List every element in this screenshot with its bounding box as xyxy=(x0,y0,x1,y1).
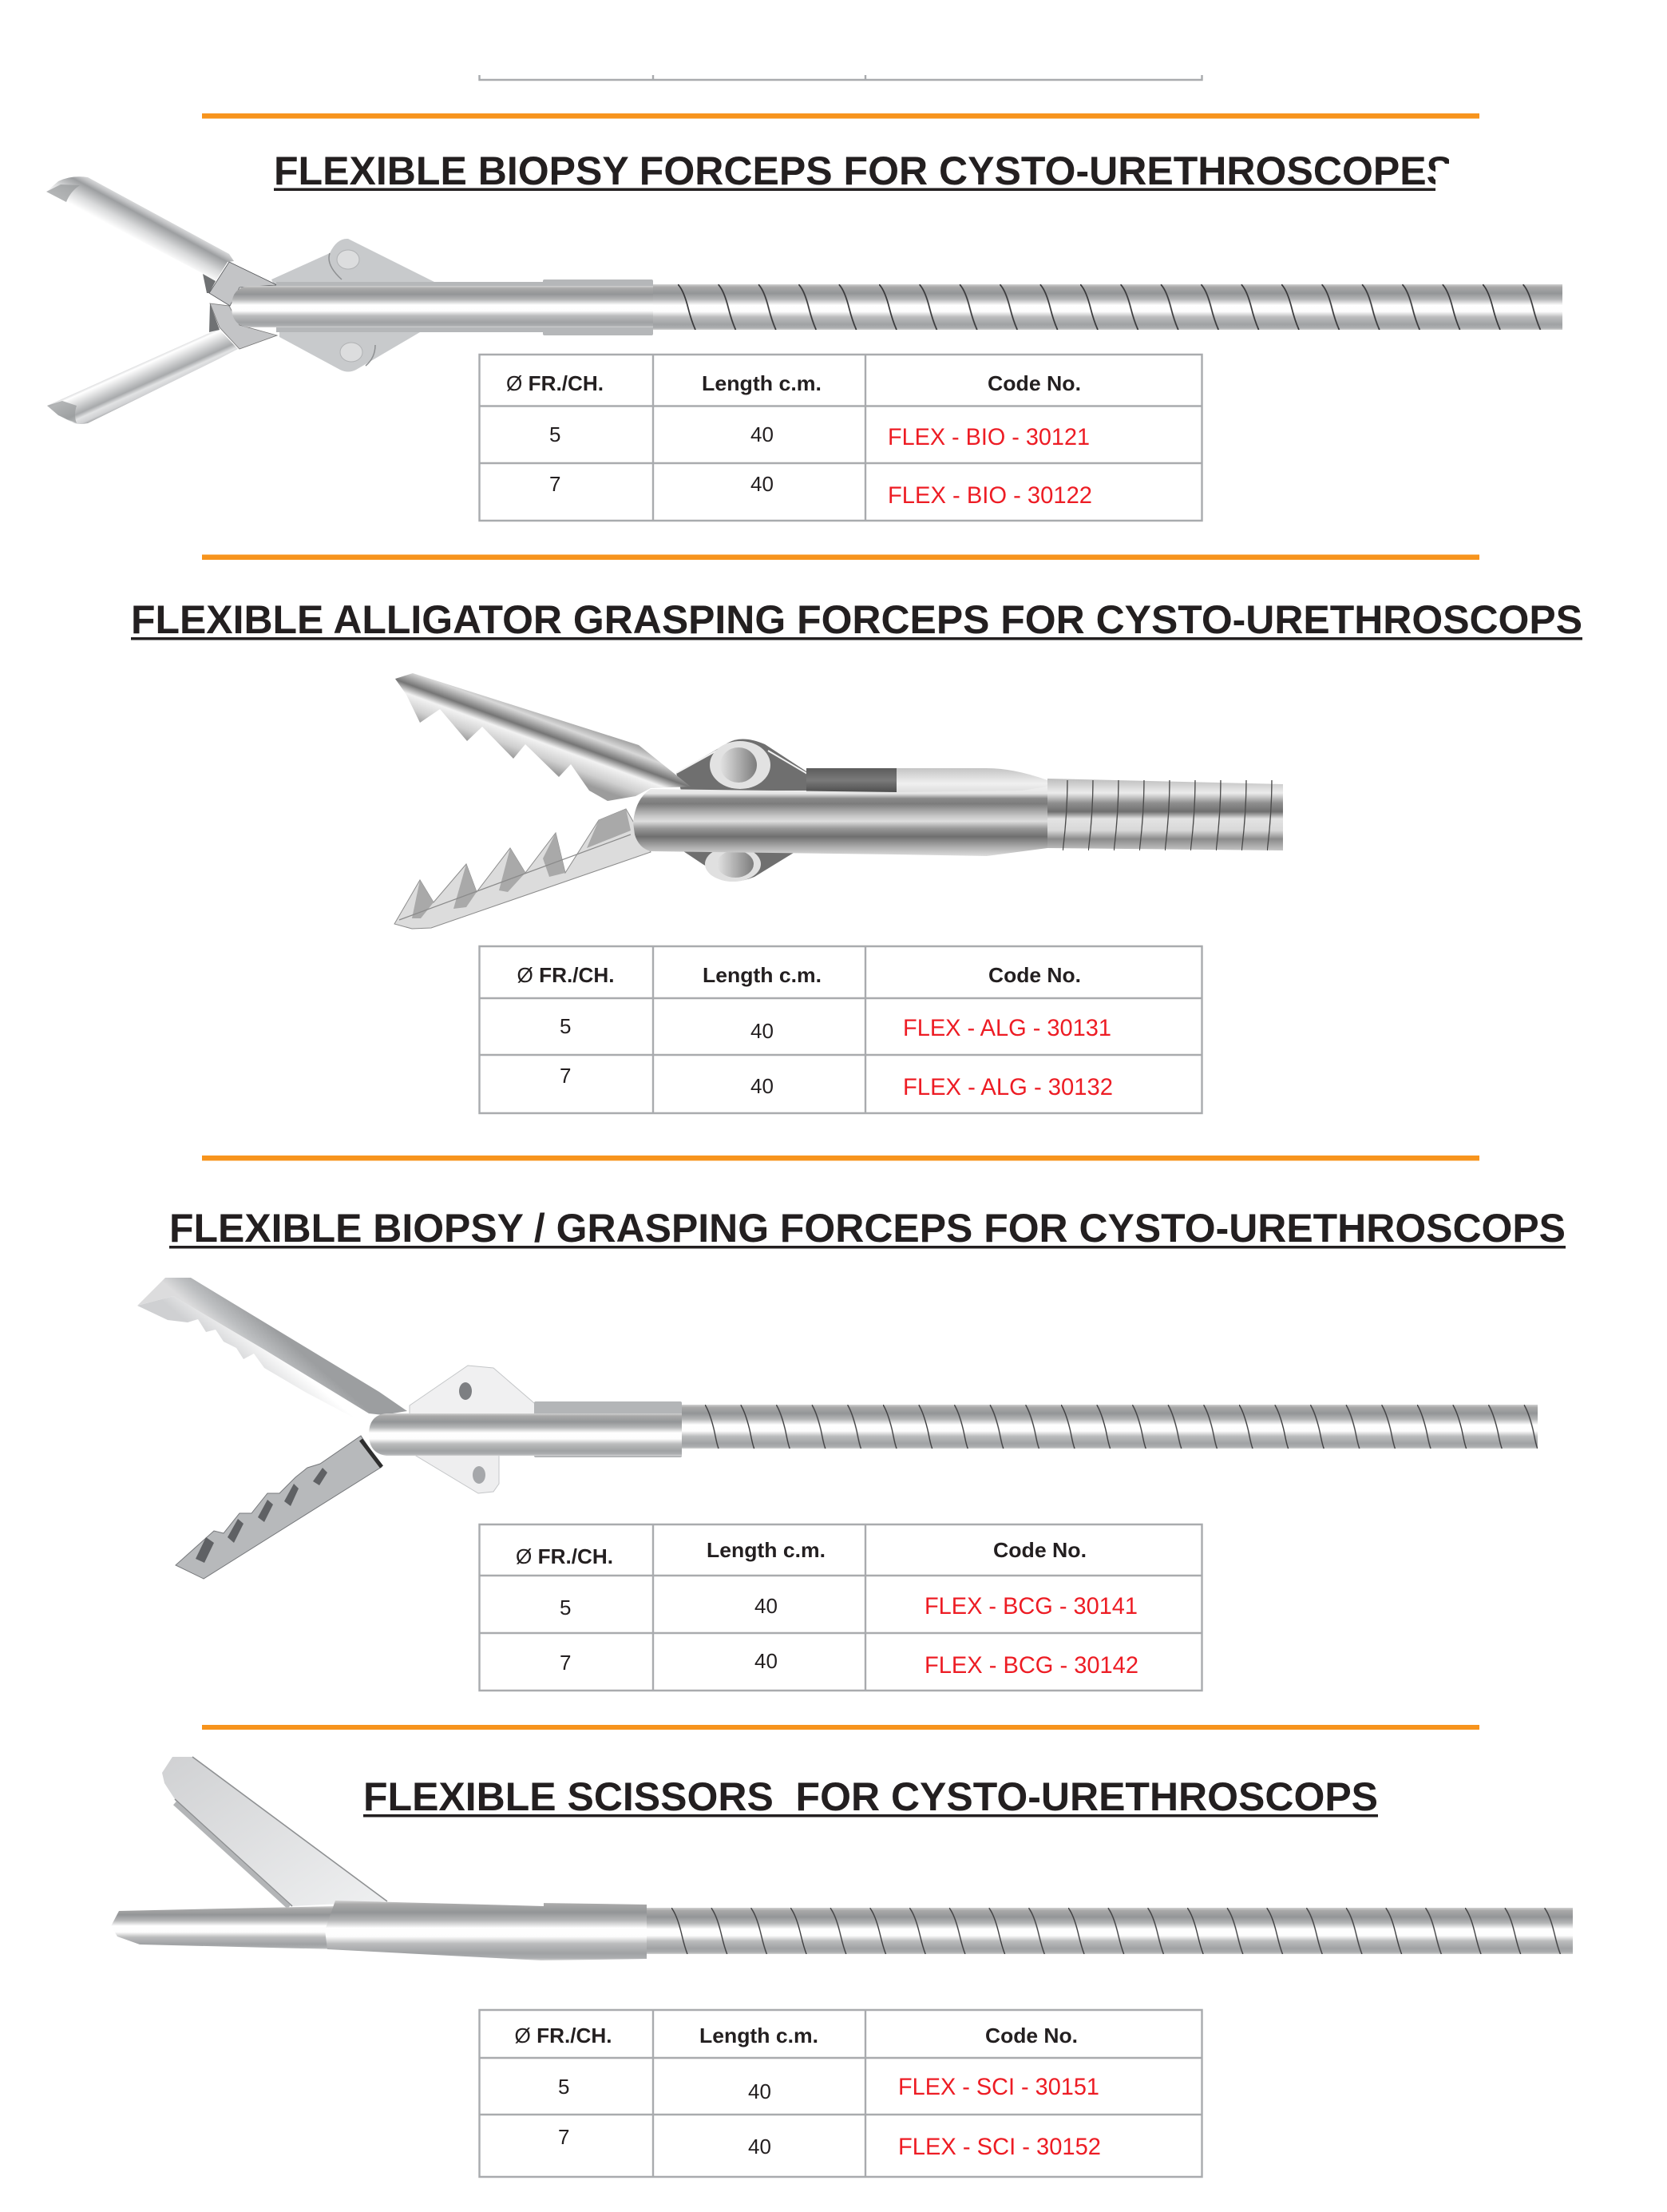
table: biopsy / grasping forceps: Ø FR./CH. xyxy=(516,1544,613,1568)
table: biopsy / grasping forceps: 40 xyxy=(754,1649,778,1673)
lower toothed jaw xyxy=(394,809,651,929)
pivot shadows xyxy=(203,274,220,332)
lower jaw xyxy=(47,330,238,424)
collar xyxy=(543,279,653,335)
table: biopsy forceps: 7 xyxy=(549,472,560,496)
upper pivot plate xyxy=(676,739,836,791)
divider: section 4 xyxy=(202,1725,1479,1730)
table: alligator grasping forceps: Code No. xyxy=(988,963,1081,987)
lower pivot plate xyxy=(676,846,804,881)
instrument: biopsy / grasping forceps xyxy=(137,1278,1538,1579)
table: alligator grasping forceps xyxy=(479,946,1202,1113)
upper jaw xyxy=(46,176,234,281)
table: biopsy forceps: 40 xyxy=(750,422,774,446)
table: flexible scissors: Code No. xyxy=(985,2024,1078,2047)
lower jaw notches xyxy=(196,1468,327,1563)
table: alligator grasping forceps: 7 xyxy=(560,1064,571,1088)
table: flexible scissors xyxy=(479,2010,1202,2177)
table: biopsy / grasping forceps: Code No. xyxy=(993,1538,1087,1562)
table: biopsy / grasping forceps xyxy=(479,1524,1202,1691)
instrument: flexible scissors xyxy=(111,1757,1573,1960)
table: biopsy forceps: 5 xyxy=(549,422,560,446)
table: biopsy / grasping forceps: 40 xyxy=(754,1594,778,1618)
table: alligator grasping forceps: FLEX - ALG - 30131 xyxy=(903,1015,1111,1041)
table: flexible scissors: 40 xyxy=(748,2079,771,2103)
table: biopsy forceps: Length c.m. xyxy=(702,371,822,395)
table: biopsy forceps: FLEX - BIO - 30121 xyxy=(888,424,1090,450)
divider: section 2 xyxy=(202,554,1479,560)
table: alligator grasping forceps: Ø FR./CH. xyxy=(517,963,615,987)
coiled shaft xyxy=(682,1405,1538,1449)
upper body xyxy=(897,768,1047,799)
ribbed shaft xyxy=(1047,779,1283,850)
table: flexible scissors: 40 xyxy=(748,2135,771,2158)
collar xyxy=(534,1401,682,1457)
fixed blade tip xyxy=(111,1906,335,1949)
table: biopsy / grasping forceps: 7 xyxy=(560,1651,571,1675)
tube xyxy=(232,286,653,327)
upper jaw tooth side xyxy=(137,1296,371,1427)
lower link plate xyxy=(279,319,420,372)
blade edges xyxy=(175,1757,387,1906)
table: alligator grasping forceps: Length c.m. xyxy=(703,963,822,987)
table: flexible scissors: FLEX - SCI - 30151 xyxy=(898,2074,1099,2100)
title: flexible biopsy forceps: FLEXIBLE BIOPSY FORCEPS FOR CYSTO-URETHROSCOPES xyxy=(274,149,1453,193)
table: biopsy forceps: 40 xyxy=(750,472,774,496)
upper link plate xyxy=(271,239,436,297)
jaw joints xyxy=(209,262,277,306)
title: flexible biopsy / grasping forceps: FLEXIBLE BIOPSY / GRASPING FORCEPS FOR CYSTO-URETHROSCOPS xyxy=(169,1206,1566,1251)
table: flexible scissors: Length c.m. xyxy=(699,2024,818,2047)
table fragment at top of page xyxy=(479,75,1202,80)
table: flexible scissors: 7 xyxy=(558,2125,569,2149)
table: alligator grasping forceps: 5 xyxy=(560,1014,571,1038)
table: flexible scissors: FLEX - SCI - 30152 xyxy=(898,2134,1101,2160)
table: alligator grasping forceps: 40 xyxy=(750,1019,774,1043)
lower link plate xyxy=(412,1453,499,1493)
upper jaw top face xyxy=(137,1278,407,1415)
instrument: alligator grasping forceps xyxy=(394,673,1283,929)
table: flexible scissors: Ø FR./CH. xyxy=(514,2024,612,2047)
table: biopsy forceps: Ø FR./CH. xyxy=(506,371,604,395)
tube xyxy=(369,1413,682,1456)
table: biopsy forceps: FLEX - BIO - 30122 xyxy=(888,482,1092,509)
title: flexible alligator grasping forceps: FLEXIBLE ALLIGATOR GRASPING FORCEPS FOR CYSTO-URETHROSCOPS xyxy=(131,597,1582,642)
scissor blade xyxy=(162,1757,387,1906)
barrel xyxy=(633,787,1047,856)
table: biopsy / grasping forceps: Length c.m. xyxy=(707,1538,826,1562)
slot xyxy=(806,768,897,792)
upper link plate xyxy=(410,1366,540,1417)
jaw tip shading xyxy=(46,184,80,423)
lower jaw tooth facets xyxy=(412,809,631,918)
coiled shaft xyxy=(647,1908,1573,1954)
rear strip xyxy=(276,282,548,332)
table: biopsy forceps xyxy=(479,355,1202,521)
upper toothed jaw xyxy=(395,673,691,801)
instrument: flexible biopsy forceps xyxy=(46,176,1562,424)
divider: section 1 xyxy=(202,113,1479,118)
table: biopsy / grasping forceps: 5 xyxy=(560,1596,571,1619)
table: biopsy forceps: Code No. xyxy=(988,371,1081,395)
table: alligator grasping forceps: FLEX - ALG - 30132 xyxy=(903,1074,1113,1100)
table: biopsy / grasping forceps: FLEX - BCG - 30141 xyxy=(925,1593,1138,1619)
table: biopsy / grasping forceps: FLEX - BCG - 30142 xyxy=(925,1652,1138,1679)
table: alligator grasping forceps: 40 xyxy=(750,1074,774,1098)
table: flexible scissors: 5 xyxy=(558,2075,569,2099)
title: flexible scissors: FLEXIBLE SCISSORS FOR CYSTO-URETHROSCOPS xyxy=(363,1774,1378,1819)
lower toothed jaw xyxy=(176,1436,382,1579)
sheath xyxy=(325,1901,647,1960)
divider: section 3 xyxy=(202,1156,1479,1161)
coiled shaft xyxy=(653,284,1562,330)
